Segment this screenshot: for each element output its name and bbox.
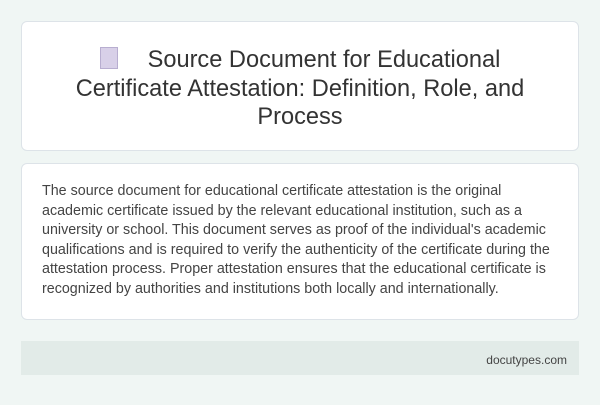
description card <box>21 163 579 320</box>
footer: docutypes.com <box>486 353 567 367</box>
title: Process <box>257 104 343 130</box>
footer <box>21 341 579 375</box>
title <box>76 47 524 130</box>
title card <box>21 21 579 151</box>
description text: The source document for educational certificate attestation is the original academic certificate issued by the relevant educational institution, such as a university or school. This document serves as proof of the individual's academic qualifications and is required to verify the authenticity of the certificate during the attestation process. Proper attestation ensures that the educational certificate is recognized by authorities and institutions both locally and internationally. <box>42 183 550 296</box>
title: Source Document for Educational <box>148 47 500 73</box>
title: Certificate Attestation: Definition, Role, and <box>76 76 524 102</box>
